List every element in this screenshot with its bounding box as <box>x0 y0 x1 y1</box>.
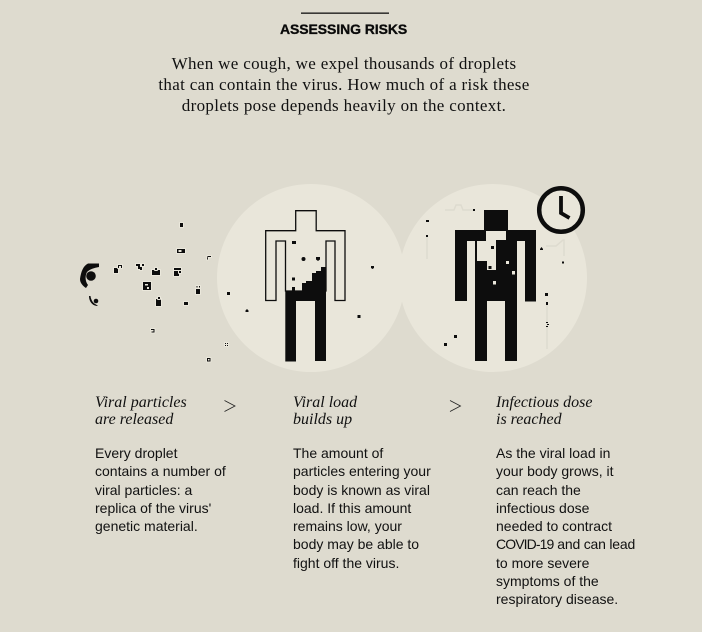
step 2 text: particles entering your <box>293 463 431 479</box>
step 2 text: body is known as viral <box>293 482 430 498</box>
step 1 text: genetic material. <box>95 518 198 534</box>
cleared region of chest <box>477 231 506 270</box>
step 1 text: viral particles: a <box>95 482 192 498</box>
droplets around body with trails <box>426 205 564 349</box>
step 2 text: remains low, your <box>293 518 402 534</box>
step 3 text: infectious dose <box>496 500 589 516</box>
droplets released <box>114 223 230 362</box>
step 3 text: As the viral load in <box>496 445 610 461</box>
step 3 heading: Infectious dose <box>496 394 592 411</box>
particles inside body <box>246 241 374 318</box>
step 3 heading <box>496 394 592 428</box>
arrow: step one to step two <box>224 400 235 412</box>
step 3 text: to more severe <box>496 554 589 570</box>
light details inside droplets <box>145 250 182 289</box>
intro text: droplets pose depends heavily on the context. <box>182 96 506 115</box>
icon: person coughing <box>80 264 99 306</box>
step 1 text: contains a number of <box>95 463 226 479</box>
step 2 heading: Viral load <box>293 394 357 411</box>
step 2 text <box>293 445 431 571</box>
intro text <box>158 54 530 115</box>
figure: body with infectious dose <box>426 205 564 361</box>
step 3 text: respiratory disease. <box>496 591 618 607</box>
step 1 text <box>95 445 226 534</box>
circle: infectious dose background <box>399 184 587 372</box>
figure: body with low viral load <box>246 211 374 362</box>
step 1 heading: Viral particles <box>95 394 187 411</box>
intro text: that can contain the virus. How much of a risk these <box>158 75 530 94</box>
step 3 text: can reach the <box>496 482 581 498</box>
arrow: step two to step three <box>450 400 460 412</box>
title: ASSESSING RISKS <box>280 21 407 37</box>
step 3 heading: is reached <box>496 411 562 428</box>
particles inside body <box>488 246 515 284</box>
step 1 text: Every droplet <box>95 445 177 461</box>
body fill: viral load level <box>285 267 326 362</box>
step 2 text: fight off the virus. <box>293 554 399 570</box>
step 3 text: COVID-19 and can lead <box>496 536 635 552</box>
icon: clock <box>539 188 583 232</box>
step 3 text: needed to contract <box>496 518 612 534</box>
intro text: When we cough, we expel thousands of droplets <box>172 54 516 73</box>
step 3 text: your body grows, it <box>496 463 614 479</box>
step 1 heading: are released <box>95 411 173 428</box>
circle: viral load background <box>217 184 405 372</box>
step 2 text: load. If this amount <box>293 500 411 516</box>
step 2 heading: builds up <box>293 411 352 428</box>
step 3 text <box>496 445 635 607</box>
rule above title <box>301 12 389 14</box>
step 2 heading <box>293 394 358 428</box>
step 1 heading <box>95 394 187 428</box>
step 3 text: symptoms of the <box>496 573 599 589</box>
step 2 text: The amount of <box>293 445 383 461</box>
step 2 text: body may be able to <box>293 536 419 552</box>
step 1 text: replica of the virus' <box>95 500 211 516</box>
